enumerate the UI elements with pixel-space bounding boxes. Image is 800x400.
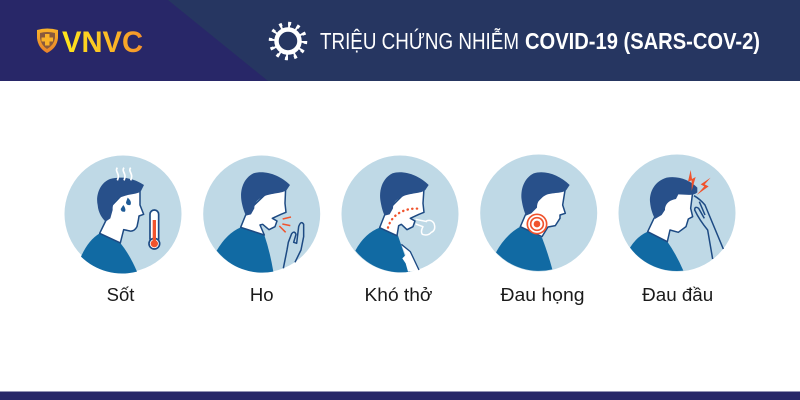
person: headache — [630, 177, 723, 271]
footer bar — [0, 392, 800, 400]
title: TRIỆU CHỨNG NHIỄM — [320, 26, 519, 54]
header bar — [0, 0, 800, 81]
label: Sốt: Sốt — [107, 284, 134, 305]
person: fever — [81, 168, 144, 274]
title: COVID-19 (SARS-COV-2) — [525, 28, 760, 54]
panel: Đau họng — [480, 154, 597, 272]
icon: throat pain target — [527, 214, 547, 234]
person: coughing — [217, 172, 304, 273]
icon: pain bolts — [688, 170, 711, 195]
icon: cough lines — [279, 217, 291, 232]
person: short of breath — [355, 172, 435, 272]
logo: VNVC: VNVC — [62, 26, 143, 59]
panel: Sốt — [64, 156, 182, 274]
person: sore throat — [496, 172, 570, 271]
label: Đau đầu: Đau đầu — [642, 284, 713, 305]
icon: coronavirus — [270, 24, 306, 58]
label: Đau họng: Đau họng — [500, 284, 584, 305]
label: Ho: Ho — [250, 284, 274, 305]
label: Khó thở: Khó thở — [364, 284, 432, 305]
icon: thermometer — [149, 210, 160, 249]
panel: Khó thở — [342, 156, 458, 272]
panel: Ho — [203, 156, 320, 273]
panel: Đau đầu — [618, 154, 736, 272]
